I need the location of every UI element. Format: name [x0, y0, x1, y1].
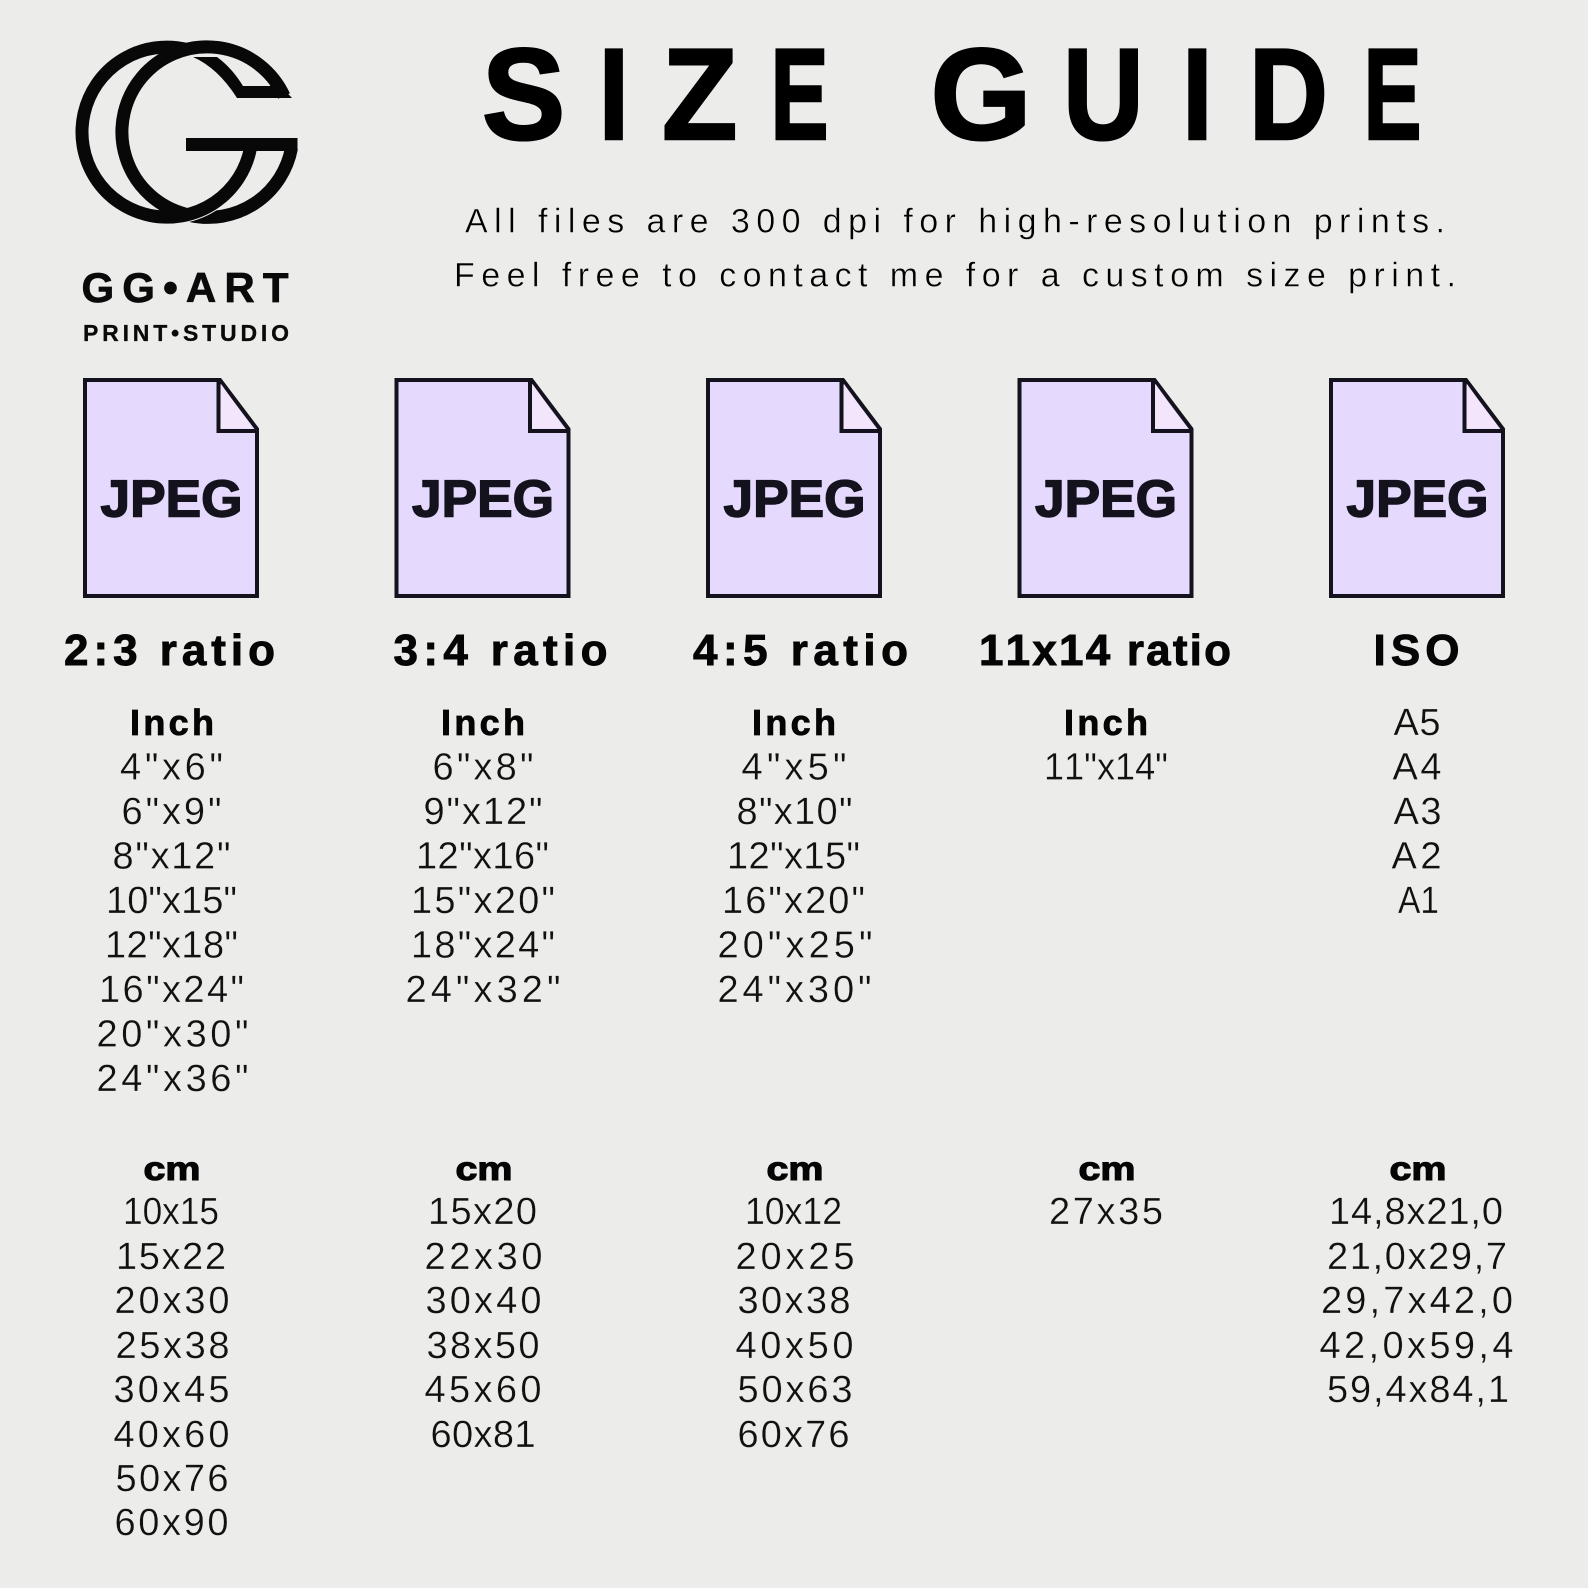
- icon: JPEG file: JPEG: [1346, 470, 1488, 528]
- cm sizes: 15x20: [428, 1191, 537, 1233]
- cm sizes: 22x30: [424, 1236, 542, 1278]
- subtitle: [454, 202, 1456, 294]
- cm sizes: cm: [766, 1150, 824, 1187]
- title: I: [598, 22, 629, 167]
- icon: JPEG file: JPEG: [724, 470, 866, 528]
- inch sizes: [96, 702, 248, 1100]
- inch sizes: 24"x30": [718, 969, 872, 1011]
- cm sizes: 60x76: [738, 1414, 850, 1456]
- cm sizes: 14,8x21,0: [1329, 1191, 1503, 1233]
- subtitle: All files are 300 dpi for high-resolution prints.: [465, 202, 1445, 240]
- panel: ISO: [1320, 380, 1514, 1411]
- cm sizes: 42,0x59,4: [1320, 1325, 1514, 1367]
- cm sizes: [1320, 1150, 1514, 1411]
- icon: JPEG file: JPEG: [100, 470, 242, 528]
- cm sizes: 20x25: [736, 1236, 854, 1278]
- inch sizes: [718, 702, 872, 1011]
- inch sizes: 8"x10": [736, 791, 852, 833]
- cm sizes: cm: [1078, 1150, 1136, 1187]
- panel: 2:3 ratio: [64, 380, 275, 1544]
- inch sizes: [1044, 702, 1168, 788]
- cm sizes: 30x45: [114, 1369, 230, 1411]
- cm sizes: [736, 1150, 854, 1456]
- inch sizes: 20"x25": [718, 924, 872, 966]
- inch sizes: 15"x20": [411, 880, 555, 922]
- title: Z: [662, 21, 737, 167]
- heading: 11x14 ratio: 11x14 ratio: [979, 626, 1231, 675]
- panel: 11x14 ratio: [979, 380, 1231, 1233]
- inch sizes: 6"x9": [122, 791, 222, 833]
- cm sizes: cm: [144, 1150, 200, 1187]
- inch sizes: Inch: [130, 702, 214, 743]
- title: E: [1364, 23, 1422, 167]
- heading: 4:5 ratio: 4:5 ratio: [693, 626, 908, 675]
- logo: GG Art Print Studio: [82, 47, 298, 346]
- inch sizes: 4"x5": [742, 746, 846, 788]
- icon: JPEG file: JPEG: [1035, 470, 1177, 528]
- icon: JPEG file: [1020, 380, 1192, 596]
- cm sizes: cm: [456, 1150, 512, 1187]
- heading: 2:3 ratio: 2:3 ratio: [64, 626, 275, 675]
- inch sizes: 16"x20": [722, 880, 865, 922]
- inch sizes: 11"x14": [1044, 746, 1168, 788]
- cm sizes: 40x60: [114, 1414, 230, 1456]
- heading: ISO: ISO: [1374, 626, 1460, 675]
- title: D: [1249, 22, 1328, 167]
- cm sizes: 50x76: [116, 1458, 228, 1500]
- cm sizes: 59,4x84,1: [1327, 1369, 1509, 1411]
- cm sizes: [424, 1150, 542, 1456]
- ISO sizes: A5: [1394, 702, 1440, 744]
- cm sizes: 10x15: [123, 1191, 219, 1233]
- ISO sizes: A1: [1398, 880, 1439, 922]
- inch sizes: Inch: [441, 702, 525, 743]
- title: E: [770, 23, 829, 167]
- title: S: [482, 23, 565, 168]
- cm sizes: 21,0x29,7: [1327, 1236, 1507, 1278]
- cm sizes: 60x90: [114, 1502, 228, 1544]
- cm sizes: 60x81: [430, 1414, 536, 1456]
- cm sizes: 30x40: [426, 1280, 542, 1322]
- ISO sizes: A3: [1394, 791, 1442, 833]
- subtitle: Feel free to contact me for a custom size print.: [454, 256, 1456, 294]
- inch sizes: 24"x36": [96, 1058, 248, 1100]
- heading: 3:4 ratio: 3:4 ratio: [394, 626, 608, 675]
- inch sizes: 4"x6": [120, 746, 223, 788]
- title: G: [930, 21, 1032, 167]
- inch sizes: Inch: [1064, 702, 1148, 743]
- logo tagline: PRINT•STUDIO: [83, 320, 289, 346]
- icon: JPEG file: JPEG: [412, 470, 554, 528]
- inch sizes: 18"x24": [411, 924, 555, 966]
- cm sizes: 45x60: [424, 1369, 542, 1411]
- title: I: [1182, 22, 1213, 167]
- inch sizes: 24"x32": [406, 969, 560, 1011]
- icon: JPEG file: [396, 380, 568, 596]
- panel: 4:5 ratio: [693, 380, 908, 1456]
- inch sizes: [406, 702, 560, 1011]
- inch sizes: 9"x12": [424, 791, 542, 833]
- inch sizes: 16"x24": [99, 969, 244, 1011]
- cm sizes: 15x22: [116, 1236, 226, 1278]
- inch sizes: 8"x12": [112, 836, 230, 878]
- panel: 3:4 ratio: [394, 380, 608, 1456]
- inch sizes: 12"x18": [105, 924, 238, 966]
- ISO sizes: A4: [1392, 746, 1442, 788]
- icon: JPEG file: [708, 380, 880, 596]
- inch sizes: Inch: [752, 702, 836, 743]
- cm sizes: 10x12: [745, 1191, 842, 1233]
- ISO sizes: A2: [1392, 836, 1442, 878]
- icon: JPEG file: [1331, 380, 1503, 596]
- inch sizes: 12"x16": [416, 836, 549, 878]
- cm sizes: [1049, 1150, 1163, 1233]
- cm sizes: [114, 1150, 230, 1544]
- title: [482, 21, 1422, 168]
- icon: interlocking G monogram: [82, 47, 298, 217]
- logo wordmark: GG•ART: [82, 264, 289, 311]
- cm sizes: 20x30: [114, 1280, 230, 1322]
- cm sizes: 38x50: [426, 1325, 540, 1367]
- inch sizes: 6"x8": [432, 746, 534, 788]
- icon: JPEG file: [85, 380, 257, 596]
- cm sizes: 30x38: [738, 1280, 850, 1322]
- inch sizes: 12"x15": [727, 836, 860, 878]
- cm sizes: 25x38: [116, 1325, 230, 1367]
- cm sizes: 27x35: [1049, 1191, 1163, 1233]
- cm sizes: 40x50: [736, 1325, 854, 1367]
- cm sizes: 29,7x42,0: [1321, 1280, 1513, 1322]
- ISO sizes: [1392, 702, 1442, 922]
- cm sizes: cm: [1390, 1150, 1446, 1187]
- title: U: [1063, 21, 1144, 167]
- cm sizes: 50x63: [738, 1369, 852, 1411]
- inch sizes: 10"x15": [106, 880, 237, 922]
- inch sizes: 20"x30": [96, 1014, 248, 1056]
